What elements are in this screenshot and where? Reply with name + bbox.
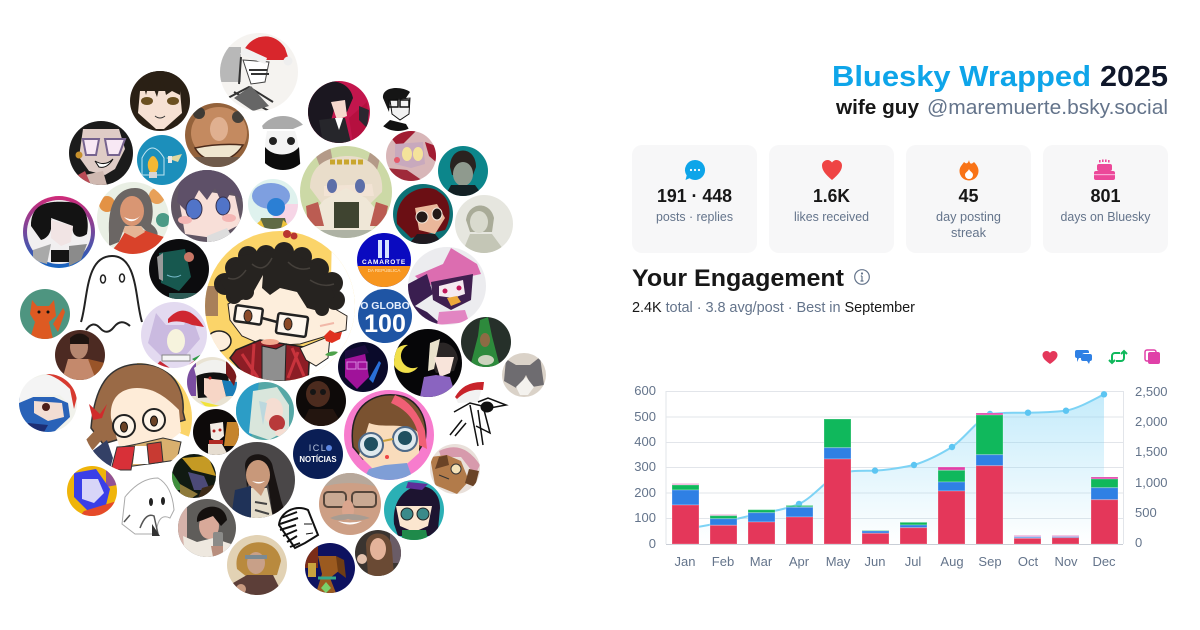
avatar: white rabbit sketch xyxy=(122,478,174,536)
panel: day posting streak: streak xyxy=(951,225,986,240)
avatar: moon anime girl xyxy=(393,329,462,397)
panel: days on Bluesky xyxy=(1043,145,1168,253)
panel: posts and replies xyxy=(632,145,757,253)
icon: info xyxy=(855,270,869,284)
stacked bars xyxy=(672,413,1118,544)
right axis labels xyxy=(1135,384,1168,550)
avatar: pale teal apple woman xyxy=(236,382,294,440)
avatar: lightbulb birdcage xyxy=(137,135,187,185)
left axis labels: 600 xyxy=(634,383,656,398)
right axis labels: 2,000 xyxy=(1135,414,1168,429)
bar: Jan xyxy=(672,483,699,544)
left axis labels xyxy=(634,383,656,551)
avatar: onigiri anime xyxy=(300,146,392,238)
panel: posts and replies: 191 · 448 xyxy=(657,186,732,206)
panel: day posting streak: 45 xyxy=(958,186,978,206)
heading: Your Engagement: Your Engagement xyxy=(632,265,844,292)
avatar: santa stick figure xyxy=(450,382,506,446)
display name and handle xyxy=(835,97,1168,119)
avatar: red curly hair girl xyxy=(393,184,453,244)
icon: likes legend xyxy=(1042,351,1058,364)
avatar: dark teal robot xyxy=(149,239,209,299)
month labels: Aug xyxy=(940,554,964,569)
avatar: main curly hair glasses character xyxy=(205,230,355,381)
month labels: Jul xyxy=(905,554,921,569)
avatar: dark sunglasses man xyxy=(296,376,346,426)
bar: Mar xyxy=(748,510,775,544)
month labels: Sep xyxy=(978,554,1002,569)
avatar: Camarote da República logo: CAMAROTE xyxy=(362,259,406,266)
right axis labels: 1,500 xyxy=(1135,444,1168,459)
avatar: scooby doo xyxy=(305,543,355,593)
engagement summary text: 2.4K total · 3.8 avg/post · Best in September xyxy=(632,300,915,316)
bar: Dec xyxy=(1091,477,1118,544)
grid lines xyxy=(666,391,1124,544)
avatar: O Globo 100 logo: O GLOBO xyxy=(360,300,410,312)
avatar: ICL Notícias logo: NOTÍCIAS xyxy=(299,455,337,464)
bar: Jun xyxy=(862,530,889,544)
icon: replies legend xyxy=(1075,350,1092,364)
avatar: pink hat boy xyxy=(430,444,480,494)
avatar cluster xyxy=(19,33,546,595)
avatar: woman in blazer xyxy=(219,442,295,518)
month labels: Feb xyxy=(712,554,734,569)
bar: Feb xyxy=(710,514,737,544)
avatar: gray pencil sketch xyxy=(455,195,513,253)
display name and handle: wife guy xyxy=(835,97,920,119)
avatar: purple hair chibi xyxy=(384,480,444,540)
avatar: ICL Notícias logo xyxy=(293,429,343,479)
avatar: woman peace sign xyxy=(355,530,401,576)
avatar: Camarote da República logo: DA REPÚBLICA xyxy=(368,267,400,273)
avatar: pink monster xyxy=(386,131,436,181)
panel: likes received: likes received xyxy=(794,209,869,224)
left axis labels: 200 xyxy=(634,485,656,500)
chart: monthly engagement xyxy=(634,383,1168,569)
bar: Sep xyxy=(976,413,1003,544)
icon: flame xyxy=(960,160,978,180)
title: Bluesky Wrapped xyxy=(832,61,1091,93)
left axis labels: 0 xyxy=(649,536,656,551)
panel: days on Bluesky: 801 xyxy=(1090,186,1120,206)
avatar: colorful curly woman xyxy=(97,182,170,254)
display name and handle: @maremuerte.bsky.social xyxy=(927,97,1168,119)
avatar: renaissance painting woman xyxy=(55,330,105,380)
icon: cake xyxy=(1094,160,1115,180)
icon: quotes legend xyxy=(1145,350,1160,364)
month labels: Jun xyxy=(865,554,885,569)
month labels: Nov xyxy=(1054,554,1078,569)
avatar: green costume xyxy=(461,317,511,367)
month labels: May xyxy=(826,554,851,569)
avatar: blue smurf xyxy=(248,179,298,229)
left axis labels: 400 xyxy=(634,434,656,449)
avatar: face photo xyxy=(185,103,249,169)
month labels: Oct xyxy=(1018,554,1038,569)
avatar: shadow hedgehog cowboy xyxy=(408,247,486,325)
left axis labels: 500 xyxy=(634,409,656,424)
avatar: curly blonde hair xyxy=(227,535,287,595)
icon: reposts legend xyxy=(1109,351,1127,363)
panel: day posting streak: day posting xyxy=(936,209,1001,224)
bar: Apr xyxy=(786,505,813,544)
avatar: santa manga man xyxy=(220,33,298,111)
cumulative line xyxy=(685,394,1104,529)
avatar: ICL Notícias logo: ICL xyxy=(309,443,327,453)
avatar: brown hair anime xyxy=(130,71,190,131)
bar: Oct xyxy=(1014,535,1041,544)
avatar: O Globo 100 logo: 100 xyxy=(364,310,406,338)
chart legend icons xyxy=(1042,350,1160,364)
avatar: teal woman xyxy=(438,146,488,196)
cumulative area xyxy=(685,394,1104,544)
month labels xyxy=(675,554,1116,569)
right axis labels: 500 xyxy=(1135,505,1157,520)
avatar: red cap black hair comic xyxy=(187,357,237,407)
avatar: old man with moustache xyxy=(319,473,381,535)
avatar: blaze purple cat xyxy=(141,302,207,368)
avatar: orange cat xyxy=(20,289,70,339)
avatar: neon purple man xyxy=(338,342,388,392)
avatar: glasses woman xyxy=(69,121,133,185)
bar: Aug xyxy=(938,467,965,544)
avatar: blue face on orange xyxy=(67,466,117,516)
right axis labels: 2,500 xyxy=(1135,384,1168,399)
panel: day posting streak xyxy=(906,145,1031,253)
avatar: ghost drawing xyxy=(81,256,142,332)
avatar: red and black anime xyxy=(308,81,370,143)
avatar: O Globo 100 logo xyxy=(358,289,412,343)
right axis labels: 1,000 xyxy=(1135,475,1168,490)
avatar: black hair selfie xyxy=(178,499,236,557)
avatar: Camarote da República logo xyxy=(357,233,411,288)
icon: speech bubble xyxy=(685,160,705,180)
bar: Nov xyxy=(1052,535,1079,544)
avatar: black white lineart head xyxy=(277,505,321,549)
avatar: gray and white cat xyxy=(502,353,546,397)
month labels: Dec xyxy=(1092,554,1116,569)
panel: likes received: 1.6K xyxy=(813,186,850,206)
left axis labels: 100 xyxy=(634,510,656,525)
avatar: upside down character xyxy=(259,115,307,175)
avatar: red eyes ghost woman xyxy=(193,409,239,455)
month labels: Jan xyxy=(675,554,695,569)
avatar: blue hair santa xyxy=(19,374,78,432)
icon: heart xyxy=(822,160,842,180)
title: 2025 xyxy=(1100,61,1168,93)
panel: likes received xyxy=(769,145,894,253)
avatar: gold hat villain xyxy=(172,454,216,498)
avatar: ring black hair woman xyxy=(23,196,95,268)
avatar: brown hair glasses girl xyxy=(82,363,192,473)
right axis labels: 0 xyxy=(1135,535,1142,550)
bar: May xyxy=(824,419,851,544)
avatar: glasses lineart man xyxy=(373,81,423,131)
left axis labels: 300 xyxy=(634,459,656,474)
month labels: Apr xyxy=(789,554,810,569)
bar: Jul xyxy=(900,522,927,544)
cumulative line points xyxy=(796,391,1107,507)
avatar: pink border chibi xyxy=(344,390,434,480)
panel: days on Bluesky: days on Bluesky xyxy=(1060,209,1151,224)
avatar: purple hair anime xyxy=(171,170,243,242)
panel: posts and replies: posts · replies xyxy=(656,209,733,224)
month labels: Mar xyxy=(750,554,773,569)
